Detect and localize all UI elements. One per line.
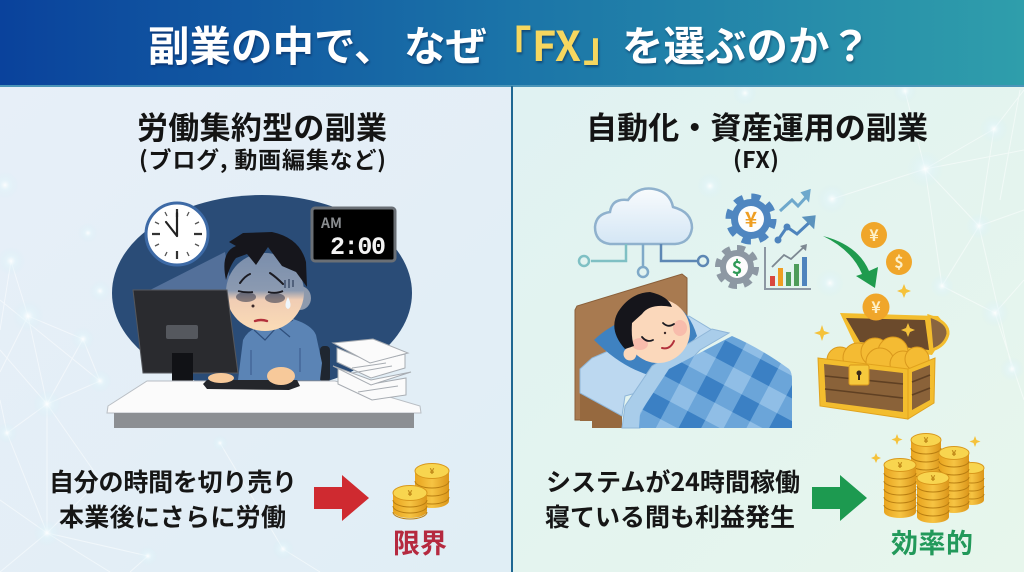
hair <box>224 232 307 287</box>
icon: wall clock <box>146 203 208 265</box>
arrow: curved green arrow <box>823 236 878 288</box>
chest side <box>908 358 935 419</box>
illustration: sleeping person in bed <box>575 274 792 428</box>
text block: 24 hour system <box>545 463 800 534</box>
chest front <box>818 358 908 419</box>
bed frame <box>580 393 622 428</box>
label: limit: 限界 <box>393 522 447 561</box>
illustration: treasure chest <box>818 313 949 419</box>
sparkles <box>814 284 980 463</box>
lock <box>849 365 869 385</box>
text block: time for money: 本業後にさらに労働 <box>59 498 286 534</box>
eye bags <box>236 292 256 302</box>
page background right <box>512 86 1024 572</box>
stacked papers <box>333 339 411 400</box>
illustration: overworked man at desk at 2 AM <box>107 195 421 428</box>
keyboard and hands <box>203 367 300 390</box>
headboard <box>575 274 687 420</box>
blanket plaid <box>639 336 792 428</box>
icon: large coin stacks: ¥ <box>898 460 903 471</box>
lid back <box>840 313 949 355</box>
nose and mouth <box>252 304 254 308</box>
icon: small coin stacks <box>393 464 449 519</box>
mattress <box>580 316 712 416</box>
subheading: examples: (ブログ, 動画編集など) <box>139 141 386 175</box>
title: 副業の中で、 <box>148 13 395 73</box>
header band <box>0 0 1024 87</box>
icon: digital clock AM 2:00 <box>312 208 395 262</box>
pillow <box>594 303 697 376</box>
icon: large coin stacks <box>884 434 984 523</box>
icon: large coin stacks: ¥ <box>952 448 957 459</box>
arrow: green <box>812 475 867 521</box>
arrow: red <box>314 475 369 521</box>
title: 「 <box>490 13 532 73</box>
sweat lines and drop <box>285 279 293 288</box>
panel: labor-intensive side job <box>49 103 449 561</box>
text block: time for money <box>49 463 297 534</box>
icon: coin above chest: ¥ <box>871 294 881 318</box>
label: efficient: 効率的 <box>891 522 973 561</box>
blanket band <box>622 329 729 428</box>
icon: falling coins: ¥ <box>869 222 879 246</box>
title: なぜ <box>404 13 487 73</box>
center divider <box>511 86 513 572</box>
text block: 24 hour system: 寝ている間も利益発生 <box>545 498 795 534</box>
icon: small coin stacks: ¥ <box>430 466 435 477</box>
icon: upward trend arrows <box>776 191 814 242</box>
icon: coin above chest <box>862 294 890 320</box>
icon: cloud with connectors <box>579 188 708 277</box>
eyebrows <box>240 273 283 284</box>
icon: large coin stacks: ¥ <box>924 435 929 446</box>
man <box>224 232 322 380</box>
heading: automation: 自動化・資産運用の副業 <box>586 103 928 148</box>
icon: falling coins <box>861 222 912 275</box>
icon: dollar gear: $ <box>732 254 742 280</box>
coin pile <box>827 337 929 377</box>
face <box>226 253 304 331</box>
icon: large coin stacks: ¥ <box>931 473 936 484</box>
torso <box>238 319 322 380</box>
page background left <box>0 86 512 572</box>
icon: digital clock AM 2:00: 2:00 <box>330 233 386 262</box>
subheading: FX: (FX) <box>733 141 779 175</box>
text block: time for money: 自分の時間を切り売り <box>49 463 297 499</box>
chair <box>320 346 330 382</box>
icon: digital clock AM 2:00: AM <box>320 213 342 233</box>
icon: yen gear <box>729 197 773 241</box>
light cone <box>150 252 232 290</box>
text block: 24 hour system: システムが24時間稼働 <box>546 463 800 499</box>
icon: dollar gear <box>718 248 756 286</box>
heading: labor-intensive: 労働集約型の副業 <box>137 103 387 148</box>
icon: falling coins: $ <box>894 249 904 273</box>
title: を選ぶのか？ <box>622 13 871 73</box>
panel: automation and asset management <box>545 103 984 561</box>
icon: yen gear: ¥ <box>745 204 758 234</box>
head <box>614 292 690 363</box>
monitor <box>133 290 238 401</box>
dark night background <box>112 195 412 391</box>
icon: bar chart <box>765 244 811 289</box>
icon: small coin stacks: ¥ <box>408 488 413 499</box>
ear <box>289 286 311 310</box>
sparkle <box>901 323 915 337</box>
title: FX <box>532 13 581 73</box>
title: 」 <box>583 13 625 73</box>
desk <box>107 381 421 428</box>
